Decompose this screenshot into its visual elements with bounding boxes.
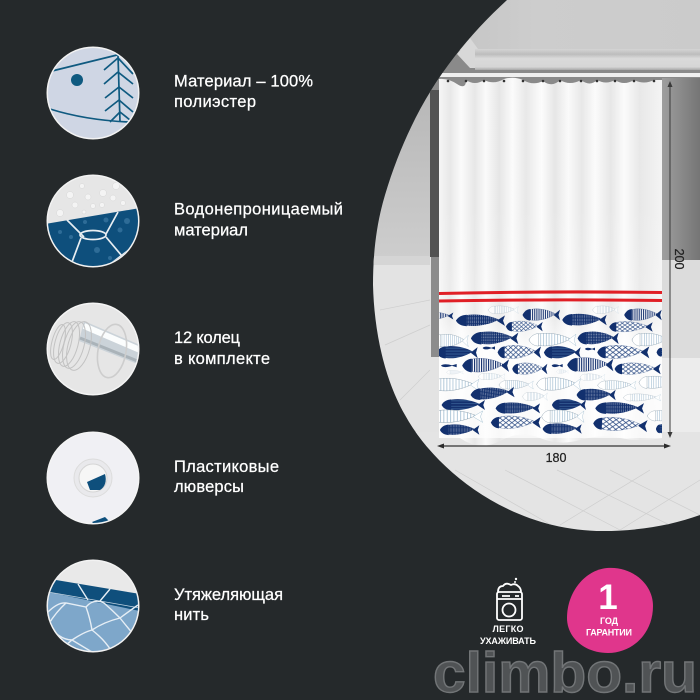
text: waterproof: материал [174, 222, 248, 240]
text: rings: 12 колец [174, 329, 241, 347]
label: 180: 180 [546, 451, 566, 465]
fish pattern [439, 306, 662, 436]
feature: rings [45, 302, 270, 399]
icon: hem thread close-up [45, 560, 141, 656]
text: material: полиэстер [174, 93, 256, 111]
badge: easy care [480, 578, 537, 646]
text: warranty: ГОД [600, 616, 619, 626]
lower right wall [662, 260, 700, 360]
right wall [662, 78, 700, 260]
lower strip [431, 257, 439, 357]
dimension: width arrow [437, 444, 671, 448]
text: easy care: УХАЖИВАТЬ [480, 636, 537, 646]
text: grommets: Пластиковые [174, 458, 279, 476]
curtain [439, 78, 662, 446]
ceiling [460, 0, 700, 50]
floor [416, 432, 700, 531]
feature: material [45, 45, 313, 141]
number: 1: 1 [598, 578, 618, 617]
curtain rod [438, 73, 700, 77]
curtain grommets [447, 80, 655, 82]
badge: one year warranty [567, 568, 653, 653]
icon: fish fabric close-up [45, 45, 141, 141]
text: rings: в комплекте [174, 350, 270, 368]
panel: bathroom photo [370, 0, 700, 535]
label: 200: 200 [672, 249, 686, 269]
pink blob [567, 568, 653, 653]
text: grommets: люверсы [174, 478, 244, 496]
text: warranty: ГАРАНТИИ [586, 628, 632, 638]
icon: curtain rod rings close-up [45, 302, 141, 399]
left wall [374, 76, 440, 256]
feature: weighted thread [45, 560, 283, 656]
text: waterproof: Водонепроницаемый [174, 200, 343, 218]
feature: grommets [45, 432, 279, 528]
dimension: height arrow [668, 81, 672, 438]
red stripes [439, 292, 662, 301]
text: easy care: ЛЕГКО [492, 624, 524, 634]
icon: water drops close-up [45, 174, 141, 271]
crown moulding [475, 49, 700, 70]
bathtub [662, 358, 700, 432]
floor tile lines [380, 300, 700, 530]
back wall [430, 50, 700, 91]
text: weighted thread: нить [174, 606, 209, 624]
icon: washing machine [497, 578, 522, 620]
dark wall strip [430, 90, 439, 257]
feature: waterproof [45, 174, 343, 271]
lower left tile wall [370, 256, 440, 447]
corner moulding [457, 38, 478, 68]
text: material: Материал – 100% [174, 72, 313, 90]
icon: plastic grommet close-up [45, 432, 141, 528]
text: weighted thread: Утяжеляющая [174, 586, 283, 604]
wainscot ledge [370, 256, 430, 265]
